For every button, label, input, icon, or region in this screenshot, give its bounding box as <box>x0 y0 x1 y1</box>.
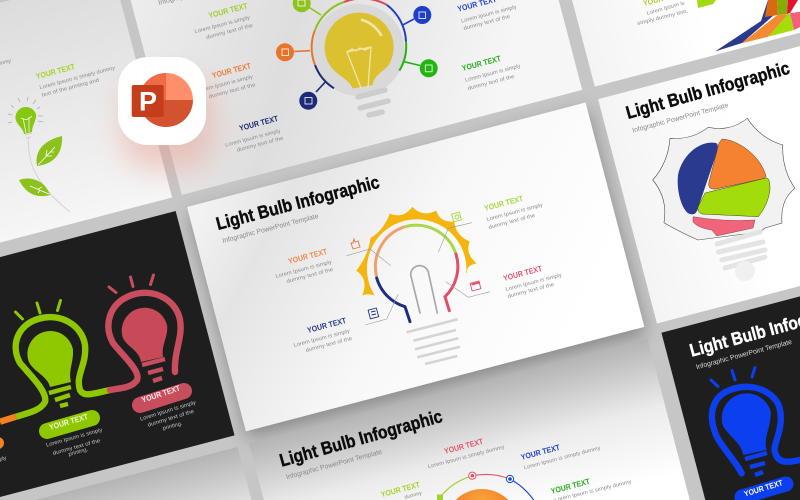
text block: navy: Lorem Ipsum is simply <box>225 128 282 149</box>
text block: navy: YOUR TEXT <box>238 114 279 133</box>
node: lime <box>293 0 321 15</box>
text block: simply dummy text. <box>637 9 689 27</box>
text block: green: YOUR TEXT <box>550 477 591 496</box>
blue rays <box>711 368 755 386</box>
text block: red: Lorem Ipsum is simply dummy <box>427 444 506 470</box>
badge: letter P: P <box>139 86 157 116</box>
red text block <box>140 400 197 432</box>
icon: lower leaf <box>19 179 50 196</box>
blue bulb fill <box>722 393 771 455</box>
slide: top center bulb with nodes <box>123 0 582 195</box>
text block <box>637 0 689 27</box>
red pill <box>140 391 184 405</box>
slide: dark bulbs <box>0 211 235 500</box>
text block: navy <box>293 316 353 354</box>
slide: top left plant bulb <box>0 0 172 302</box>
text block: orange: dummy text of the <box>286 267 334 285</box>
text block: lime: YOUR TEXT <box>208 1 249 20</box>
text block: green: Lorem Ipsum is simply <box>465 63 522 84</box>
text block: orange: YOUR TEXT <box>211 61 252 80</box>
blue bulb outline <box>712 387 800 473</box>
text block: lorem <box>39 65 116 99</box>
subtitle: Infographic PowerPoint Template <box>695 339 793 371</box>
arc: red <box>445 254 458 311</box>
arc: green <box>405 225 456 254</box>
blue pill <box>742 484 786 497</box>
text block: green: YOUR TEXT <box>461 54 502 73</box>
piece: orange <box>709 139 766 189</box>
icon: upper leaf <box>37 136 62 166</box>
screw base <box>717 232 765 268</box>
starburst bulb outline <box>653 118 795 240</box>
colored wedge <box>715 0 800 52</box>
text block: green: dummy text of the <box>467 74 515 92</box>
orange ball <box>445 489 519 500</box>
text block: green: Lorem Ipsum is simply <box>486 202 544 223</box>
piece: red <box>693 217 755 236</box>
text block: lime: YOUR TEXT <box>380 480 421 499</box>
red rays <box>109 275 154 292</box>
title: Light Bulb Infographic <box>277 406 445 471</box>
red bulb outline <box>108 293 181 390</box>
blue bulb base <box>745 453 767 475</box>
text block: blue: Lorem Ipsum is simply dummy <box>523 445 602 471</box>
green rays <box>16 300 60 319</box>
red bulb fill <box>122 308 167 362</box>
icon: lime bulb <box>8 97 43 138</box>
text block: navy: dummy text of the <box>305 336 353 354</box>
icon: powerpoint badge <box>118 57 214 170</box>
text block: red: YOUR TEXT <box>443 437 484 456</box>
text block: orange: dummy text of the <box>208 82 256 100</box>
red text block: printing. <box>162 421 183 432</box>
green bulb outline <box>16 317 110 417</box>
text block: lime: Lorem Ipsum is simply <box>194 15 251 35</box>
text block: orange: Lorem Ipsum is simply <box>197 74 254 94</box>
subtitle: Infographic PowerPoint Template <box>632 102 729 135</box>
node: orange <box>276 43 310 61</box>
connector lines <box>347 223 490 325</box>
bulb tip <box>735 261 755 281</box>
text block: lorem: Lorem Ipsum is simply dummy <box>39 65 116 91</box>
text block: navy: YOUR TEXT <box>306 316 347 335</box>
arc: navy <box>377 278 410 322</box>
node: green <box>404 59 438 77</box>
text block: red <box>427 437 506 470</box>
base lines <box>407 319 460 364</box>
text block: red <box>502 264 563 300</box>
subtitle: Infographic PowerPoint Template <box>222 213 319 245</box>
icon: navy doc <box>368 308 379 319</box>
piece: navy <box>678 143 718 214</box>
text block: orange: YOUR TEXT <box>287 247 328 266</box>
arc: orange <box>375 227 405 277</box>
text block: red: YOUR TEXT <box>502 264 543 283</box>
green text block: Lorem Ipsum is simply <box>46 427 103 449</box>
connector orange <box>0 417 16 422</box>
text block: lime: dummy text of the <box>206 23 254 41</box>
text block: orange <box>275 247 334 285</box>
green pill <box>47 418 92 431</box>
icon: orange thumb <box>351 239 360 249</box>
text block: lorem: text of the printing and <box>41 78 100 99</box>
piece: lime <box>698 178 770 217</box>
slide: center light bulb infographic <box>187 102 644 431</box>
title: Light Bulb Infographic <box>214 172 382 234</box>
heading: your text lime: YOUR TEXT <box>35 62 76 81</box>
ring segments <box>312 0 406 88</box>
red pill label: YOUR TEXT <box>141 384 181 405</box>
icon: red calendar <box>470 281 481 291</box>
slide: top right wedge <box>536 0 800 87</box>
bulb screw base <box>358 90 388 115</box>
text block: green <box>461 54 522 92</box>
sun rays <box>357 207 476 295</box>
badge: pie quarters <box>139 73 193 127</box>
green text block: printing. <box>68 447 89 458</box>
node: blue <box>403 6 431 25</box>
subtitle: Infographic PowerPoint Template <box>285 449 383 481</box>
red bulb base <box>142 359 165 381</box>
nodes <box>437 472 514 500</box>
text block: navy: Lorem Ipsum is simply <box>293 328 351 349</box>
green bulb base <box>49 387 71 406</box>
orange node fragment <box>0 437 4 449</box>
text block: Lorem Ipsum is <box>646 0 686 17</box>
text block: blue <box>457 0 518 32</box>
pill label: YOUR TEXT <box>48 412 89 432</box>
red text block: Lorem Ipsum is simply <box>140 400 197 423</box>
text block: navy <box>225 114 284 154</box>
slide: right pie bulb <box>598 0 800 324</box>
icon: plant stem <box>28 138 70 212</box>
red text block: dummy text of the <box>147 409 195 429</box>
slide: bottom left <box>0 447 296 500</box>
slide: bottom center <box>249 338 706 500</box>
filament <box>411 266 437 313</box>
green text block: dummy text of the <box>52 438 101 457</box>
text block: orange: Lorem Ipsum is simply <box>275 259 333 280</box>
lime block <box>697 0 716 8</box>
text block: blue: dummy text of the <box>463 14 511 32</box>
icon: green doc <box>452 212 461 222</box>
blue pill label: YOUR TEXT <box>743 478 784 499</box>
bulb highlight and filament <box>347 20 381 88</box>
text block: blue: YOUR TEXT <box>520 443 561 462</box>
text block: red: dummy text of the <box>507 282 555 300</box>
text block: green: dummy text of the <box>488 213 536 231</box>
text block: blue: Lorem Ipsum is simply <box>461 4 518 25</box>
badge: letter square <box>132 85 164 117</box>
text block: lime <box>194 1 254 41</box>
green text block <box>46 427 103 458</box>
bulb disc <box>313 4 405 96</box>
slide: bottom right dark <box>661 228 800 500</box>
text block: navy: dummy text of the <box>236 136 284 154</box>
text block: green <box>483 194 544 231</box>
arc chart <box>440 474 535 500</box>
center slide shadow <box>189 110 646 439</box>
text block: green: YOUR TEXT <box>483 194 524 213</box>
node: navy <box>299 82 325 110</box>
green bulb fill <box>27 331 73 387</box>
text block: orange <box>197 61 256 100</box>
text block: red: Lorem Ipsum is simply <box>505 272 563 293</box>
yellow bulb <box>325 13 394 88</box>
